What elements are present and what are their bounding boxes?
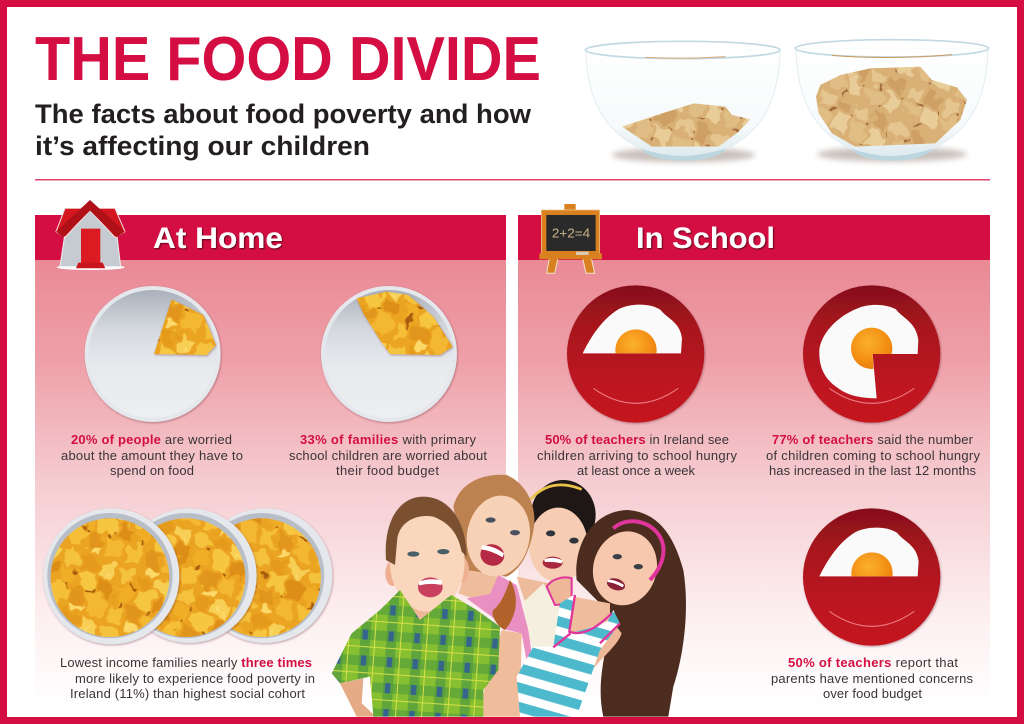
plate: 77% of teachers, egg three quarters xyxy=(803,285,940,423)
heading: in school: In School xyxy=(636,222,775,255)
text: three times: more likely to experience food poverty in xyxy=(75,671,315,686)
bowl: small portion xyxy=(585,41,780,162)
child: boy in plaid shirt xyxy=(332,497,500,717)
text: 50% of teachers in Ireland: at least once a week xyxy=(577,463,696,478)
panel: in school xyxy=(518,204,990,710)
text: 50% of teachers report: parents have mentioned concerns xyxy=(771,671,974,686)
divider line xyxy=(35,179,990,180)
header bar: at home xyxy=(35,215,506,260)
text: 33% of families: school children are worried about xyxy=(289,448,487,463)
child: girl in striped dress xyxy=(517,510,686,717)
text: 20% of people: 20% of people are worried xyxy=(71,432,232,447)
text: 77% of teachers xyxy=(766,432,980,478)
icon: chalkboard easel xyxy=(539,204,602,273)
text: 33% of families: 33% of families with primary xyxy=(300,432,476,447)
heading: at home: At Home xyxy=(153,222,283,255)
text: 50% of teachers report: 50% of teachers report that xyxy=(788,655,958,670)
child: girl in pink top xyxy=(453,475,536,717)
text: three times xyxy=(60,655,315,701)
plate: 20% of people xyxy=(85,286,227,422)
text: 77% of teachers: has increased in the last 12 months xyxy=(769,463,976,478)
panel background: at home xyxy=(35,260,506,710)
text: three times: Lowest income families nearly three times xyxy=(60,655,312,670)
subtitle: it’s affecting our children xyxy=(35,131,370,161)
header bar: in school xyxy=(518,215,990,260)
text: 77% of teachers: of children coming to school hungry xyxy=(766,448,980,463)
plate: 50% of teachers, egg half xyxy=(567,285,704,423)
subtitle xyxy=(35,99,532,161)
subtitle: The facts about food poverty and how xyxy=(35,99,532,129)
text: 50% of teachers in Ireland: 50% of teachers in Ireland see xyxy=(545,432,729,447)
text: 50% of teachers report xyxy=(771,655,974,701)
text: 50% of teachers in Ireland: children arriving to school hungry xyxy=(537,448,738,463)
panel: at home xyxy=(35,200,506,710)
image: two glass bowls of cereal xyxy=(585,40,989,162)
text: three times: Ireland (11%) than highest social cohort xyxy=(70,686,305,701)
image: four laughing children xyxy=(332,475,686,717)
text: 77% of teachers: 77% of teachers said the number xyxy=(772,432,974,447)
icon: chalkboard easel: 2+2=4 xyxy=(552,226,590,240)
text: 33% of families: their food budget xyxy=(336,463,439,478)
bowl: large portion xyxy=(795,40,989,162)
icon: house xyxy=(56,200,125,270)
text: 20% of people: about the amount they have to xyxy=(61,448,243,463)
text: 50% of teachers report: over food budget xyxy=(823,686,922,701)
plate: 33% of families xyxy=(321,283,463,422)
panel background: in school xyxy=(518,260,990,710)
plates: three full plates of cereal xyxy=(40,507,333,647)
plate: 50% of teachers, budget concerns xyxy=(803,508,940,646)
title: THE FOOD DIVIDE xyxy=(35,25,541,94)
child: girl with yellow headband xyxy=(517,480,596,650)
text: 20% of people: spend on food xyxy=(110,463,194,478)
text: 50% of teachers in Ireland xyxy=(537,432,738,478)
text: 20% of people xyxy=(61,432,243,478)
text: 33% of families xyxy=(289,432,487,478)
